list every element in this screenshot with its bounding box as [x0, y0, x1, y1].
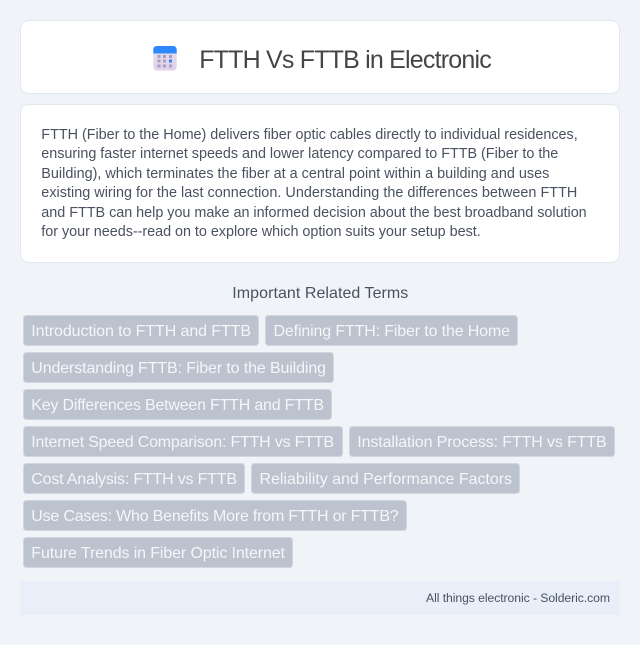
tag [24, 352, 334, 382]
tag: Key Differences Between FTTH and FTTB [31, 397, 324, 414]
tag [350, 426, 614, 456]
panel: header card [20, 20, 620, 94]
intro paragraph: FTTH (Fiber to the Home) delivers fiber optic cables directly to individual residences, [41, 127, 578, 143]
tag: Cost Analysis: FTTH vs FTTB [31, 471, 237, 488]
tag: Defining FTTH: Fiber to the Home [274, 323, 510, 340]
heading: important related terms: Important Related Terms [232, 285, 408, 302]
title: FTTH Vs FTTB in Electronic [199, 46, 492, 74]
tag: Use Cases: Who Benefits More from FTTH or FTTB? [31, 508, 399, 525]
tag [24, 316, 258, 346]
tag [24, 500, 406, 530]
intro paragraph: Building), which terminates the fiber at a central point within a building and uses [41, 166, 549, 182]
tag: Introduction to FTTH and FTTB [31, 323, 251, 340]
footer: All things electronic - Solderic.com [426, 591, 610, 605]
icon: calendar [153, 46, 177, 70]
tag: Installation Process: FTTH vs FTTB [357, 434, 607, 451]
tag: Future Trends in Fiber Optic Internet [31, 545, 286, 562]
intro paragraph: existing wiring for the last connection. Understanding the differences between FTTH [41, 185, 577, 201]
tag: Reliability and Performance Factors [260, 471, 512, 488]
tag [24, 426, 342, 456]
tag [24, 538, 292, 568]
tag [24, 390, 332, 420]
intro paragraph [41, 127, 587, 240]
tag [24, 464, 244, 494]
intro paragraph: and FTTB can help you make an informed decision about the best broadband solution [41, 205, 587, 221]
intro paragraph: for your needs--read on to explore which option suits your setup best. [41, 224, 481, 240]
footer [20, 581, 620, 615]
tag: Understanding FTTB: Fiber to the Building [31, 360, 326, 377]
tag [252, 464, 520, 494]
panel: related terms tags [24, 316, 614, 568]
panel: intro text card [20, 104, 620, 262]
tag [266, 316, 518, 346]
tag: Internet Speed Comparison: FTTH vs FTTB [31, 434, 334, 451]
intro paragraph: ensuring faster internet speeds and lower latency compared to FTTB (Fiber to the [41, 146, 558, 162]
